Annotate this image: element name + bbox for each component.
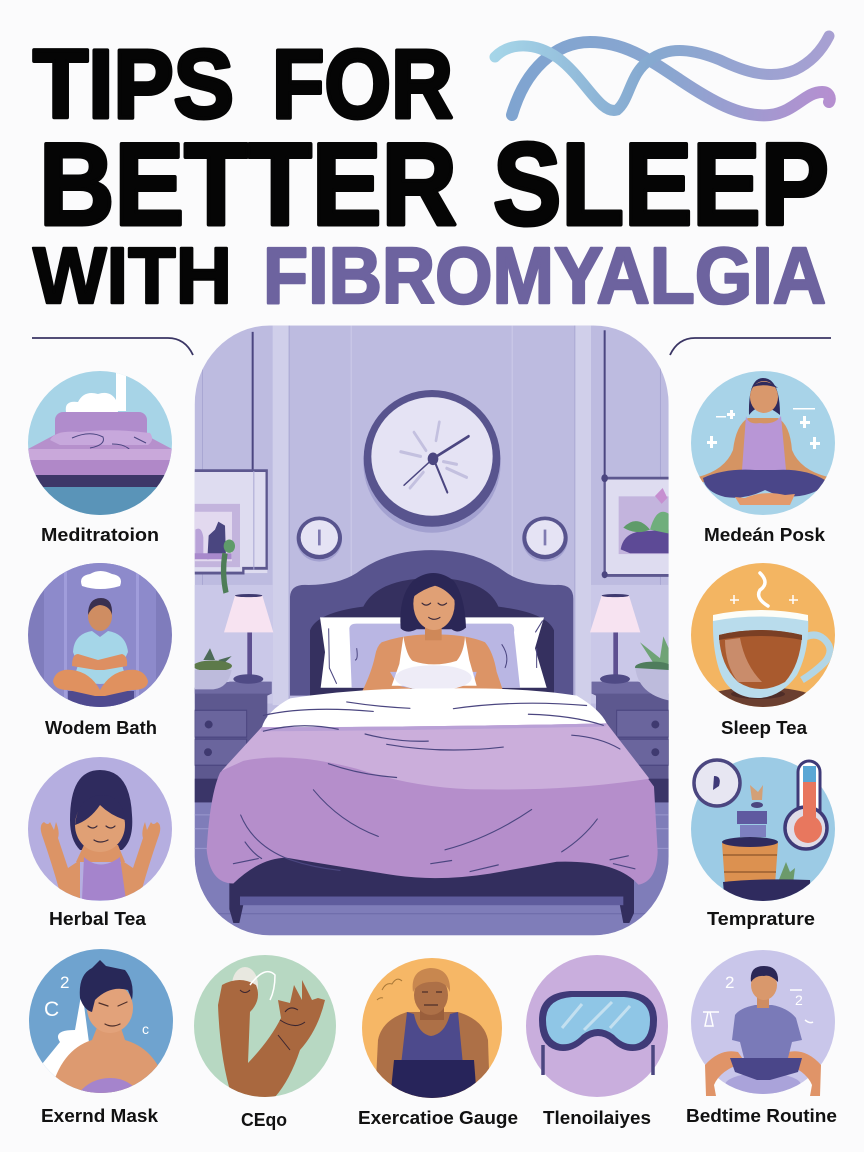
icon: seated person circle (Bedtime Routine): 2 [795, 992, 803, 1008]
nightstand: left [195, 682, 272, 802]
title word: with: WITH [33, 231, 232, 320]
label: Exernd Mask: Exernd Mask [41, 1106, 159, 1126]
lamp: right [590, 594, 640, 684]
blanket [207, 702, 658, 885]
pillows [320, 617, 547, 688]
label: Temprature: Temprature [707, 909, 815, 929]
label: Herbal Tea: Herbal Tea [49, 909, 147, 929]
title word: better: BETTER [39, 118, 457, 250]
title word: fibromyalgia: FIBROMYALGIA [263, 231, 826, 320]
wall clock [363, 390, 501, 533]
icon: temperature circle (Temprature) [691, 757, 835, 905]
icon: seated person circle (Bedtime Routine) [691, 950, 835, 1097]
decorative wave ribbon [495, 36, 830, 115]
icon: seated person circle (Wodem Bath) [28, 563, 172, 709]
label: CEqo: CEqo [241, 1110, 287, 1130]
label: Sleep Tea: Sleep Tea [721, 718, 808, 738]
lamp: left [224, 594, 273, 684]
label: Exercatioe Gauge: Exercatioe Gauge [358, 1108, 518, 1128]
icon: standing man circle (Exercatioe Gauge) [361, 958, 503, 1100]
bracket line: left [32, 338, 193, 355]
plant bowl: right [635, 636, 672, 700]
headboard [290, 550, 573, 696]
icon: meditation pose circle (Medeán Posk) [691, 371, 835, 515]
icon: sleep mask circle (Tlenoilaiyes) [526, 955, 668, 1097]
icon: tea cup circle (Sleep Tea) [691, 563, 835, 719]
icon: bed circle (Meditratoion) [28, 371, 172, 515]
small wall clock: left [297, 517, 342, 562]
framed picture: right [601, 474, 669, 578]
panel: bedroom illustration [193, 326, 672, 937]
label: Medeán Posk: Medeán Posk [704, 525, 826, 545]
sheet [262, 688, 607, 728]
icon: resting man circle (Exernd Mask): 2 [60, 973, 69, 992]
icon: resting man circle (Exernd Mask): C [44, 998, 59, 1021]
title [33, 30, 829, 320]
icon: resting man circle (Exernd Mask): c [142, 1021, 149, 1037]
label: Tlenoilaiyes: Tlenoilaiyes [543, 1108, 651, 1128]
icon: girl circle (Herbal Tea) [28, 757, 172, 901]
wall [195, 326, 669, 935]
bracket line: right [670, 338, 831, 355]
label: Wodem Bath: Wodem Bath [45, 718, 157, 738]
framed picture: left [195, 470, 267, 593]
label: Meditratoion: Meditratoion [41, 525, 159, 545]
nightstand: right [592, 682, 669, 802]
icon: seated person circle (Bedtime Routine): 2 [725, 973, 734, 992]
icon: arm and hand circle (CEqo) [194, 955, 337, 1098]
small wall clock: right [522, 517, 568, 562]
bed frame [229, 858, 634, 923]
floor [195, 802, 669, 937]
title word: for: FOR [272, 30, 453, 138]
icon: resting man circle (Exernd Mask) [29, 949, 173, 1100]
title word: tips: TIPS [33, 30, 234, 138]
sleeping woman [362, 573, 502, 690]
plant bowl: left [193, 648, 232, 689]
label: Bedtime Routine: Bedtime Routine [686, 1106, 837, 1126]
